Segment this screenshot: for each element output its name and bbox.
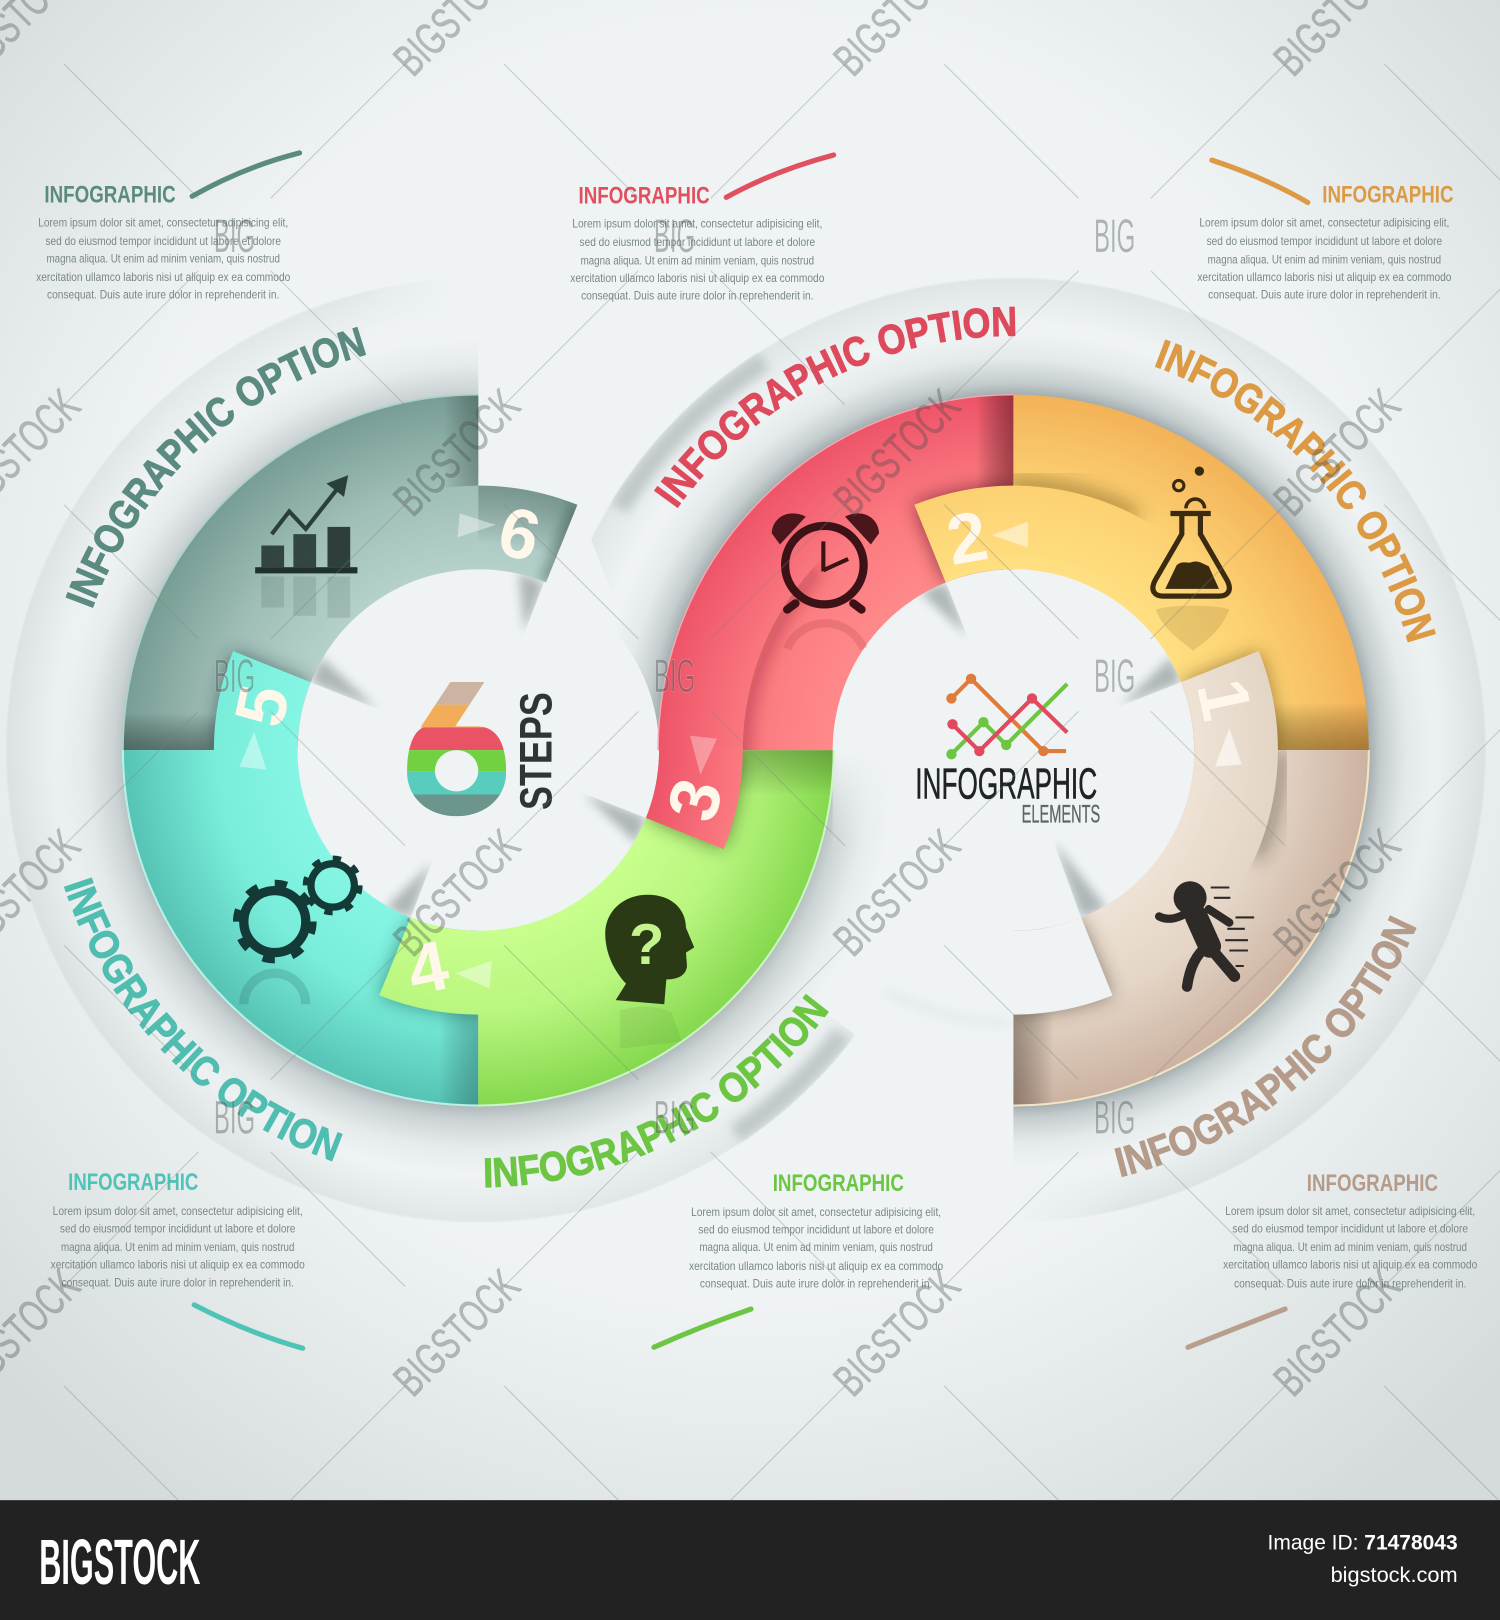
left ring centre disc [298, 569, 659, 931]
text block 4: INFOGRAPHIC [773, 1170, 904, 1197]
text block 3: consequat. Duis aute irure dolor in reprehenderit in. [581, 289, 814, 303]
halo: right ring [540, 277, 1487, 1229]
number 2 with arrow [941, 495, 1028, 580]
watermarks: BIGSTOCK: BIGSTOCK [1264, 820, 1410, 965]
watermarks: BIG: BIG [214, 210, 255, 263]
arc label: option 2: INFOGRAPHIC OPTION [1154, 339, 1436, 642]
footer bar [0, 1500, 1500, 1620]
watermarks: BIGSTOCK: BIGSTOCK [384, 1260, 529, 1406]
logo: infographic elements [915, 674, 1100, 828]
text block 5: INFOGRAPHIC [68, 1169, 198, 1196]
arc label: option 3: INFOGRAPHIC OPTION [654, 306, 1016, 508]
watermarks: BIG: BIG [654, 650, 695, 703]
head with question mark icon: ? [629, 913, 664, 977]
watermarks: BIG: BIG [1094, 210, 1135, 263]
text block 4: Lorem ipsum dolor sit amet, consectetur adipisicing elit, [691, 1205, 941, 1219]
text block 5: xercitation ullamco laboris nisi ut aliquip ex ea commodo [51, 1258, 305, 1272]
text block 5: Lorem ipsum dolor sit amet, consectetur adipisicing elit, [53, 1204, 303, 1218]
number 1 with arrow [1182, 672, 1268, 767]
text block 2 [1197, 160, 1454, 302]
segment 3: red quadrant [646, 395, 1013, 849]
watermarks: BIGSTOCK: BIGSTOCK [824, 820, 970, 965]
text block 5: consequat. Duis aute irure dolor in reprehenderit in. [61, 1275, 294, 1289]
watermarks: BIGSTOCK: BIGSTOCK [384, 380, 529, 525]
text block 6: magna aliqua. Ut enim ad minim veniam, quis nostrud [46, 251, 280, 265]
text block 5: magna aliqua. Ut enim ad minim veniam, quis nostrud [61, 1240, 295, 1254]
gears icon [237, 859, 360, 1004]
wedge shadows on centre discs [311, 572, 1181, 918]
text block 2: consequat. Duis aute irure dolor in reprehenderit in. [1208, 288, 1441, 302]
number 1 with arrow: 1 [1182, 672, 1268, 727]
watermarks: BIG: BIG [654, 210, 695, 263]
halo: left ring [6, 288, 864, 1222]
watermarks: BIGSTOCK: BIGSTOCK [824, 1260, 970, 1406]
watermarks: BIG: BIG [1094, 1091, 1135, 1144]
segment 1: beige quadrant [1013, 651, 1369, 1105]
segment 4: green quadrant [379, 750, 834, 1105]
white wedge over beige [1010, 918, 1112, 1015]
number 5 with arrow [219, 678, 304, 770]
logo: 6 steps: STEPS [511, 692, 562, 810]
segment 2: orange quadrant [914, 395, 1369, 750]
segment 5: teal quadrant [123, 651, 478, 1105]
text block 3: sed do eiusmod tempor incididunt ut labore et dolore [580, 235, 815, 249]
watermarks: BIG: BIG [214, 650, 255, 703]
text block 6: Lorem ipsum dolor sit amet, consectetur adipisicing elit, [38, 215, 288, 229]
text block 6: consequat. Duis aute irure dolor in reprehenderit in. [47, 288, 279, 302]
text block 4: xercitation ullamco laboris nisi ut aliquip ex ea commodo [689, 1259, 943, 1273]
watermarks: BIGSTOCK: BIGSTOCK [384, 820, 529, 965]
logo: infographic elements: ELEMENTS [1022, 801, 1100, 828]
text block 4 [654, 1170, 943, 1347]
text block 4: magna aliqua. Ut enim ad minim veniam, quis nostrud [699, 1240, 933, 1254]
logo: infographic elements: INFOGRAPHIC [915, 761, 1097, 809]
number 3 with arrow: 3 [651, 771, 738, 829]
text block 4: sed do eiusmod tempor incididunt ut labore et dolore [698, 1223, 934, 1237]
footer bar: Image ID: 71478043 [1268, 1530, 1458, 1555]
number 3 with arrow [651, 736, 738, 829]
watermarks: BIGSTOCK: BIGSTOCK [824, 380, 970, 525]
text block 6: sed do eiusmod tempor incididunt ut labore et dolore [45, 234, 281, 248]
arc label: option 6: INFOGRAPHIC OPTION [66, 326, 366, 608]
text block 3: INFOGRAPHIC [579, 183, 710, 210]
logo: 6 steps [407, 682, 552, 816]
text block 2: xercitation ullamco laboris nisi ut aliquip ex ea commodo [1197, 270, 1452, 284]
text block 6: xercitation ullamco laboris nisi ut aliquip ex ea commodo [36, 270, 290, 284]
watermarks: BIG: BIG [654, 1091, 695, 1144]
text block 1 [1188, 1170, 1477, 1347]
number 6 with arrow [458, 490, 548, 576]
text block 3 [570, 155, 834, 303]
watermarks: BIGSTOCK: BIGSTOCK [1264, 380, 1410, 525]
text block 2: INFOGRAPHIC [1322, 181, 1454, 209]
text block 5: sed do eiusmod tempor incididunt ut labore et dolore [60, 1222, 296, 1236]
watermarks: BIG: BIG [214, 1091, 255, 1144]
segment 6: slate green quadrant [123, 395, 577, 750]
watermarks: BIG [214, 210, 1135, 1144]
running person icon [1159, 881, 1254, 987]
arc label: option 5: INFOGRAPHIC OPTION [64, 877, 343, 1162]
flask icon [1153, 466, 1229, 651]
alarm clock icon [772, 513, 879, 649]
text block 6: INFOGRAPHIC [44, 181, 176, 209]
text block 3: xercitation ullamco laboris nisi ut aliquip ex ea commodo [570, 271, 824, 285]
arc label: option 4: INFOGRAPHIC OPTION [484, 994, 829, 1188]
footer bar: BIGSTOCK [39, 1526, 200, 1598]
arc label: option 1: INFOGRAPHIC OPTION [1114, 915, 1417, 1178]
text block 4: consequat. Duis aute irure dolor in reprehenderit in. [700, 1276, 932, 1290]
number 2 with arrow: 2 [941, 495, 993, 580]
watermarks: BIGSTOCK: BIGSTOCK [1264, 1260, 1410, 1406]
watermarks: BIG: BIG [1094, 650, 1135, 703]
text block 2: Lorem ipsum dolor sit amet, consectetur adipisicing elit, [1199, 215, 1449, 229]
number 6 with arrow: 6 [491, 490, 548, 576]
head with question mark icon [605, 895, 694, 1049]
chart icon [255, 475, 357, 618]
number 4 with arrow [400, 925, 492, 1010]
text block 2: magna aliqua. Ut enim ad minim veniam, quis nostrud [1208, 252, 1441, 266]
text block 5 [51, 1169, 305, 1348]
text block 1: INFOGRAPHIC [1307, 1170, 1438, 1197]
text block 6 [36, 153, 300, 302]
text block 3: magna aliqua. Ut enim ad minim veniam, quis nostrud [581, 253, 814, 267]
text block 3: Lorem ipsum dolor sit amet, consectetur adipisicing elit, [572, 216, 822, 230]
text block 2: sed do eiusmod tempor incididunt ut labore et dolore [1207, 234, 1442, 248]
number 5 with arrow: 5 [219, 678, 304, 733]
footer bar: bigstock.com [1331, 1562, 1458, 1587]
number 4 with arrow: 4 [400, 925, 455, 1010]
